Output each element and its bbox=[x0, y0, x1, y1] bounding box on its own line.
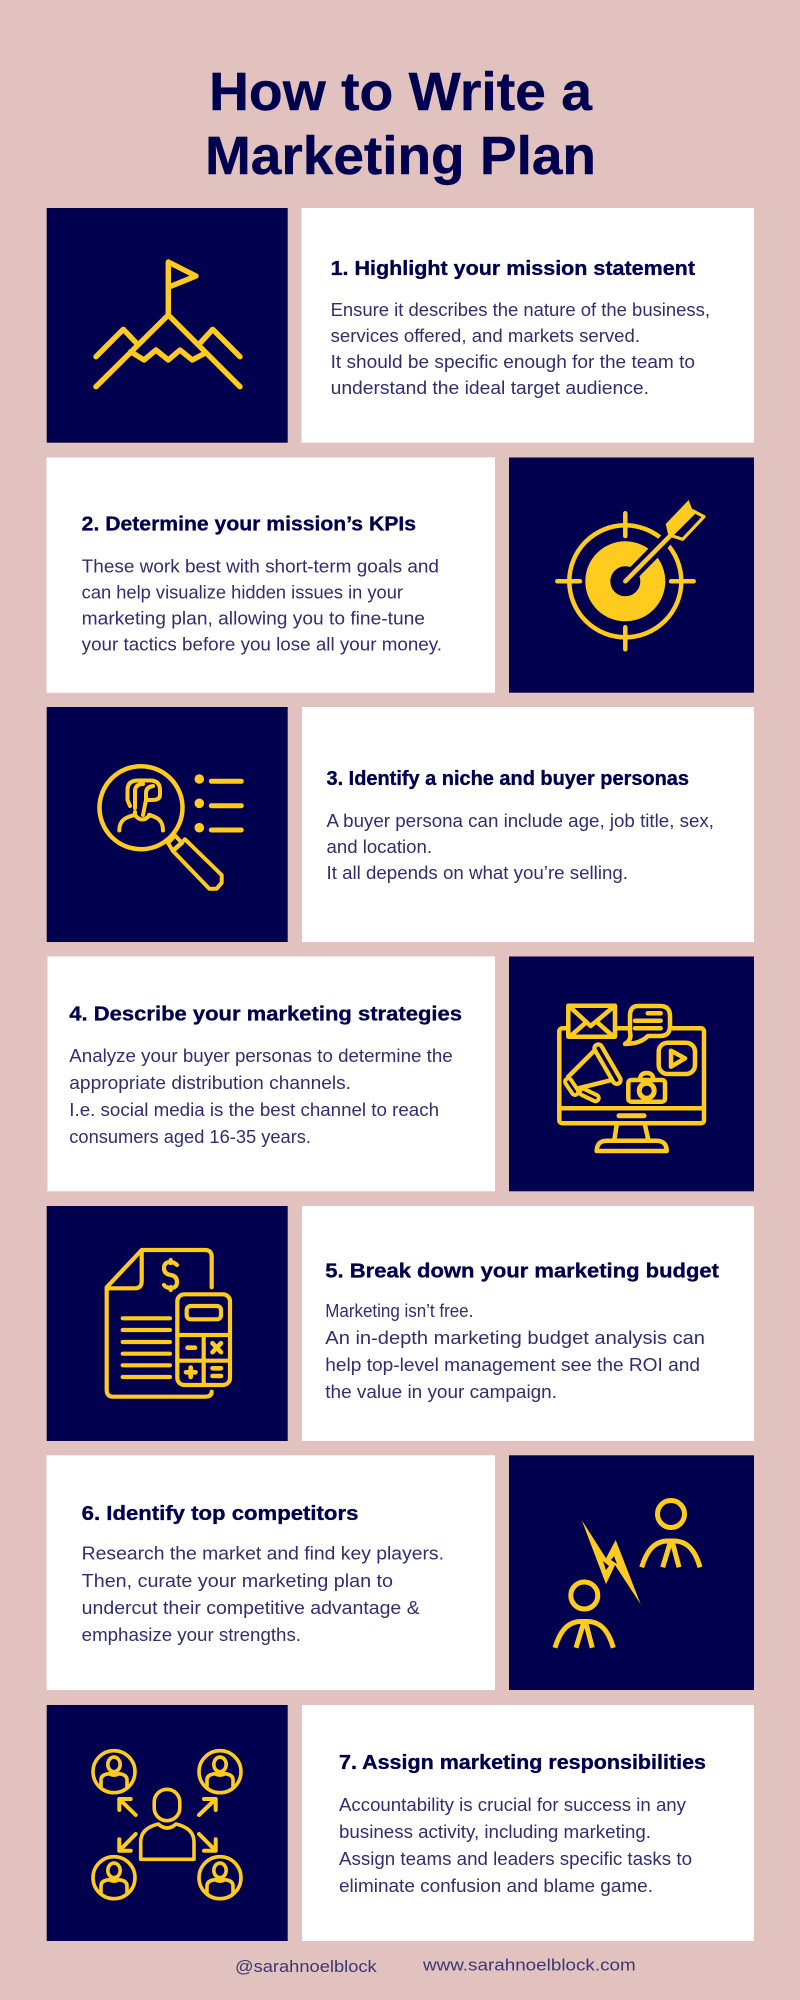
icon: budget document and calculator bbox=[107, 1250, 230, 1397]
text: step 4 body: appropriate distribution channels. bbox=[69, 1073, 351, 1093]
text: step 7 body: Assign teams and leaders specific tasks to bbox=[339, 1849, 692, 1869]
title bbox=[205, 62, 596, 186]
heading: step 1: 1. Highlight your mission statement bbox=[331, 257, 695, 280]
icon: leader assigning team members bbox=[93, 1751, 241, 1899]
text: step 7 body: eliminate confusion and blame game. bbox=[339, 1876, 653, 1896]
footer: social handle: @sarahnoelblock bbox=[235, 1957, 377, 1976]
heading: step 2: 2. Determine your mission’s KPIs bbox=[82, 513, 416, 536]
text: step 7 body bbox=[339, 1795, 692, 1896]
text: step 2 body: These work best with short-term goals and bbox=[82, 556, 439, 576]
icon: mountain with flag bbox=[96, 262, 240, 387]
icon: monitor with media bbox=[559, 1006, 704, 1151]
text: step 6 body: undercut their competitive advantage & bbox=[82, 1598, 420, 1618]
text: step 5 body: Marketing isn’t free. bbox=[325, 1301, 473, 1321]
text: step 1 body: services offered, and markets served. bbox=[331, 326, 640, 346]
title: Marketing Plan bbox=[205, 126, 596, 186]
text: step 5 body: An in-depth marketing budget analysis can bbox=[325, 1328, 705, 1348]
text: step 7 body: Accountability is crucial for success in any bbox=[339, 1795, 686, 1815]
text: step 5 body: the value in your campaign. bbox=[325, 1382, 557, 1402]
panel: step 7 icon bbox=[47, 1705, 288, 1941]
text: step 1 body bbox=[331, 300, 710, 398]
text: step 4 body: Analyze your buyer personas to determine the bbox=[69, 1046, 453, 1066]
footer: website: www.sarahnoelblock.com bbox=[422, 1956, 636, 1975]
panel: step 6 text bbox=[46, 1455, 495, 1690]
panel: step 3 text bbox=[302, 707, 754, 942]
text: step 4 body: I.e. social media is the best channel to reach bbox=[69, 1100, 439, 1120]
heading: step 6: 6. Identify top competitors bbox=[82, 1502, 358, 1525]
panel: step 1 icon bbox=[47, 208, 288, 443]
title: How to Write a bbox=[209, 62, 593, 122]
text: step 6 body: Research the market and find key players. bbox=[82, 1544, 444, 1564]
text: step 4 body: consumers aged 16-35 years. bbox=[69, 1127, 311, 1147]
panel: step 5 icon bbox=[47, 1206, 288, 1441]
heading: step 5: 5. Break down your marketing budget bbox=[325, 1260, 719, 1283]
icon: magnifier with person and list bbox=[100, 766, 241, 889]
panel: step 4 icon bbox=[509, 956, 754, 1191]
text: step 5 body: help top-level management see the ROI and bbox=[325, 1355, 700, 1375]
panel: step 4 text bbox=[48, 956, 495, 1191]
text: step 6 body: Then, curate your marketing plan to bbox=[82, 1571, 393, 1591]
text: step 3 body bbox=[326, 811, 714, 883]
panel: step 7 text bbox=[302, 1705, 754, 1941]
text: step 2 body: marketing plan, allowing you to fine-tune bbox=[82, 608, 425, 628]
heading: step 3: 3. Identify a niche and buyer personas bbox=[326, 767, 689, 790]
text: step 3 body: It all depends on what you’re selling. bbox=[326, 863, 628, 883]
icon: two competitors and lightning bolt bbox=[555, 1500, 700, 1648]
text: step 5 body bbox=[325, 1301, 705, 1402]
panel: step 1 text bbox=[302, 208, 754, 443]
text: step 1 body: Ensure it describes the nature of the business, bbox=[331, 300, 710, 320]
panel: step 2 icon bbox=[509, 458, 754, 693]
text: step 7 body: business activity, including marketing. bbox=[339, 1822, 651, 1842]
text: step 3 body: A buyer persona can include age, job title, sex, bbox=[326, 811, 714, 831]
text: step 2 body: your tactics before you lose all your money. bbox=[82, 634, 442, 654]
panel: step 6 icon bbox=[509, 1455, 754, 1690]
text: step 2 body: can help visualize hidden issues in your bbox=[82, 582, 403, 602]
text: step 3 body: and location. bbox=[326, 837, 432, 857]
panel: step 2 text bbox=[46, 458, 495, 693]
text: step 6 body bbox=[82, 1544, 444, 1645]
panel: step 5 text bbox=[302, 1206, 754, 1441]
heading: step 4: 4. Describe your marketing strategies bbox=[69, 1003, 462, 1026]
text: step 1 body: It should be specific enough for the team to bbox=[331, 352, 695, 372]
icon: target with arrow bbox=[557, 500, 704, 649]
heading: step 7: 7. Assign marketing responsibilities bbox=[339, 1751, 706, 1774]
text: step 6 body: emphasize your strengths. bbox=[82, 1625, 301, 1645]
text: step 1 body: understand the ideal target audience. bbox=[331, 378, 649, 398]
text: step 4 body bbox=[69, 1046, 453, 1147]
text: step 2 body bbox=[82, 556, 442, 654]
panel: step 3 icon bbox=[47, 707, 288, 942]
